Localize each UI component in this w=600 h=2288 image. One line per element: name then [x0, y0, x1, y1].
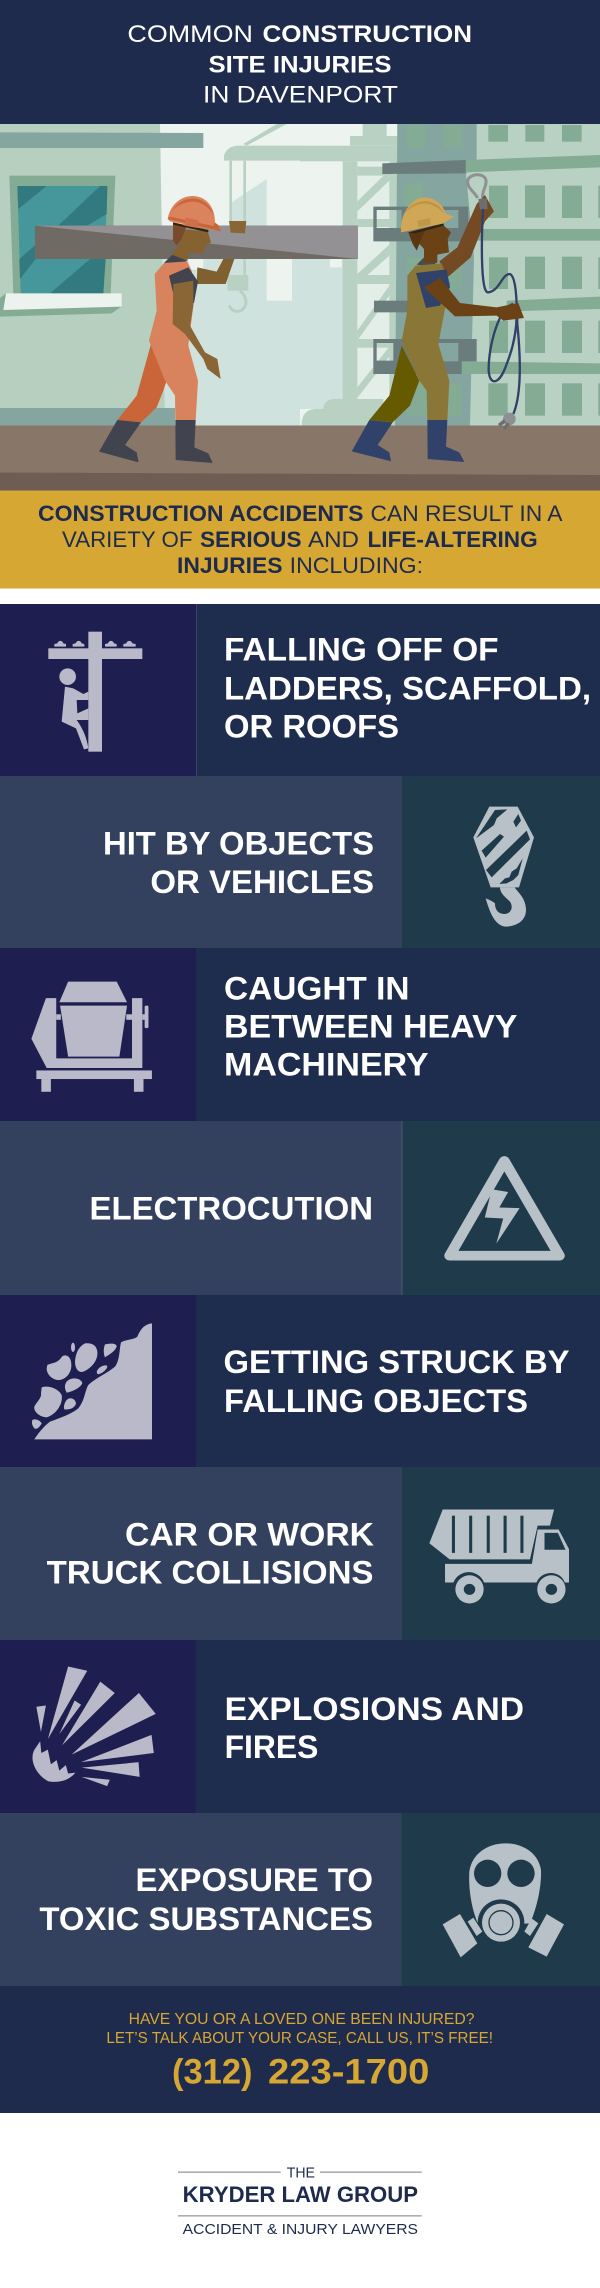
- icon: gas mask: [443, 1843, 564, 1957]
- illustration: construction workers: [0, 124, 600, 491]
- panel: hit by objects: OR VEHICLES: [150, 864, 374, 900]
- worker carrying beam: [99, 196, 234, 463]
- worker with cable: [352, 175, 524, 462]
- panel: explosions: EXPLOSIONS AND: [225, 1691, 524, 1727]
- panel: falling: OR ROOFS: [224, 708, 399, 744]
- icon: rockfall: [32, 1323, 152, 1439]
- title: CONSTRUCTION: [262, 21, 472, 48]
- panel: falling objects: GETTING STRUCK BY: [224, 1344, 570, 1380]
- icon: cement mixer: [31, 982, 152, 1092]
- panel: toxic substances: EXPOSURE TO: [136, 1862, 373, 1898]
- panel: collisions: TRUCK COLLISIONS: [47, 1554, 373, 1590]
- intro banner: INCLUDING:: [290, 553, 423, 578]
- call to action: (312): [172, 2052, 252, 2092]
- intro banner: INJURIES: [177, 553, 282, 578]
- intro banner: AND: [308, 527, 359, 552]
- panel: explosions: [0, 1640, 600, 1813]
- call to action: [0, 1986, 600, 2113]
- title: [0, 0, 600, 124]
- icon: explosion: [32, 1667, 156, 1786]
- title: COMMON: [127, 21, 253, 48]
- panel: heavy machinery: MACHINERY: [224, 1046, 429, 1082]
- panel: electrocution: ELECTROCUTION: [90, 1190, 373, 1226]
- call to action: LET’S TALK ABOUT YOUR CASE, CALL US, IT’S FREE!: [106, 2030, 493, 2047]
- panel: falling: [0, 604, 600, 776]
- icon: high voltage warning: [450, 1161, 559, 1256]
- logo: THE: [287, 2166, 315, 2182]
- ground: [0, 426, 600, 490]
- icon: dump truck: [429, 1509, 569, 1604]
- panel: toxic substances: TOXIC SUBSTANCES: [39, 1901, 373, 1937]
- logo: KRYDER LAW GROUP: [183, 2182, 418, 2207]
- panel: electrocution: [0, 1121, 600, 1295]
- panel: toxic substances: [0, 1813, 600, 1986]
- title: IN DAVENPORT: [203, 82, 398, 108]
- intro banner: LIFE-ALTERING: [368, 527, 538, 552]
- intro banner: CAN RESULT IN A: [370, 501, 562, 526]
- panel: explosions: FIRES: [225, 1729, 318, 1765]
- panel: falling objects: FALLING OBJECTS: [224, 1383, 528, 1419]
- call to action: HAVE YOU OR A LOVED ONE BEEN INJURED?: [129, 2011, 475, 2028]
- title: SITE INJURIES: [208, 51, 392, 78]
- icon: crane hook: [473, 807, 534, 927]
- intro banner: SERIOUS: [200, 527, 302, 552]
- panel: collisions: [0, 1467, 600, 1640]
- intro banner: [0, 490, 600, 588]
- panel: hit by objects: HIT BY OBJECTS: [103, 826, 374, 862]
- panel: heavy machinery: [0, 948, 600, 1121]
- logo: [178, 2166, 422, 2238]
- logo: ACCIDENT & INJURY LAWYERS: [183, 2222, 418, 2238]
- icon: worker climbing pole: [48, 632, 142, 752]
- panel: falling: FALLING OFF OF: [224, 632, 499, 668]
- panel: falling: LADDERS, SCAFFOLD,: [224, 670, 591, 706]
- panel: collisions: CAR OR WORK: [125, 1516, 375, 1552]
- call to action: 223-1700: [268, 2052, 429, 2092]
- panel: heavy machinery: BETWEEN HEAVY: [224, 1008, 518, 1044]
- intro banner: VARIETY OF: [62, 527, 192, 552]
- panel: heavy machinery: CAUGHT IN: [224, 970, 410, 1006]
- panel: hit by objects: [0, 776, 600, 948]
- intro banner: CONSTRUCTION ACCIDENTS: [38, 501, 364, 526]
- panel: falling objects: [0, 1295, 600, 1467]
